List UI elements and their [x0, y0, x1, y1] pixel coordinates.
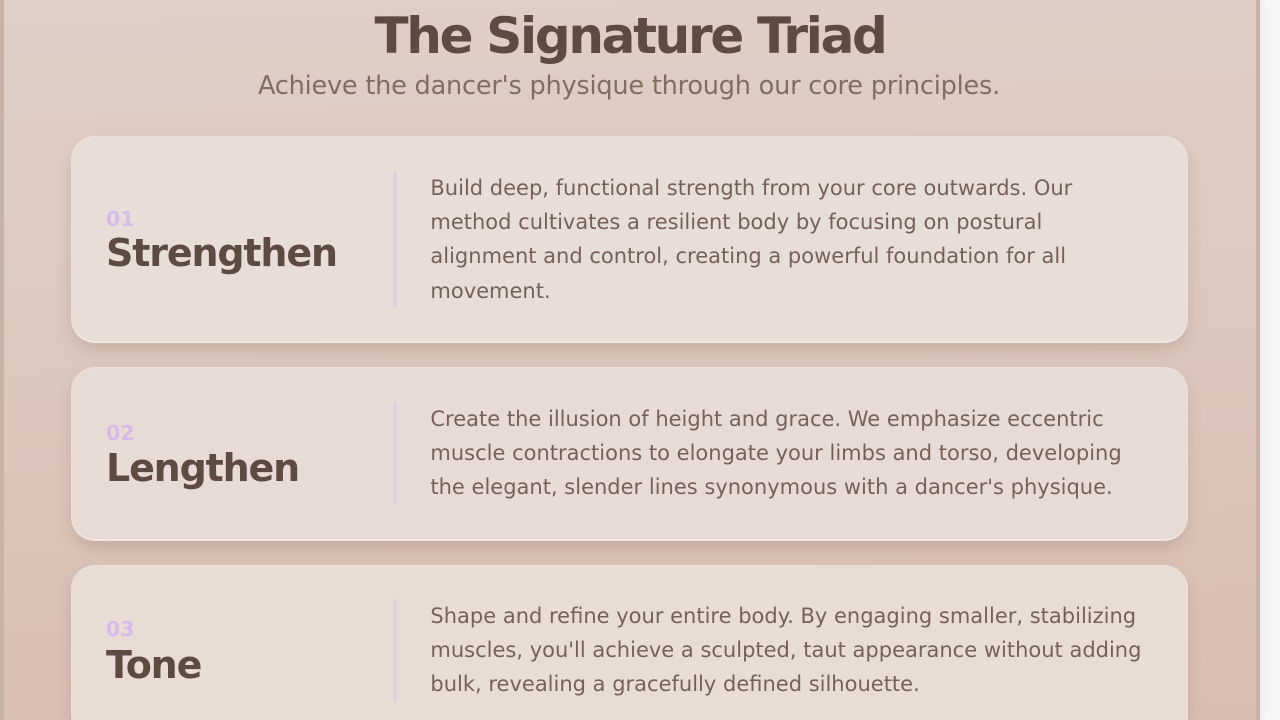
description: tone: Shape and refine your entire body. By engaging smaller, stabilizing — [430, 604, 1136, 628]
description: lengthen: the elegant, slender lines synonymous with a dancer's physique. — [430, 475, 1113, 499]
heading: lengthen: Lengthen — [106, 446, 299, 490]
description: strengthen: Build deep, functional strength from your core outwards. Our — [430, 176, 1072, 200]
heading: strengthen: Strengthen — [106, 231, 337, 275]
panel: tone card — [71, 565, 1188, 720]
description: strengthen — [430, 176, 1072, 303]
accent bar — [393, 402, 397, 505]
description: strengthen: movement. — [430, 279, 551, 303]
description: lengthen — [430, 407, 1122, 499]
heading: tone: Tone — [106, 642, 201, 686]
subtitle: Achieve the dancer's physique through our core principles. — [258, 71, 1000, 101]
step number 02: 02 — [106, 420, 135, 444]
description: tone — [430, 604, 1141, 696]
description: tone: bulk, revealing a gracefully defined silhouette. — [430, 672, 920, 696]
panel: strengthen card — [71, 136, 1188, 343]
panel: lengthen card — [71, 367, 1188, 541]
description: strengthen: method cultivates a resilient body by focusing on postural — [430, 210, 1042, 234]
title: The Signature Triad — [374, 7, 886, 65]
step number 03: 03 — [106, 616, 135, 640]
step number 01: 01 — [106, 206, 135, 230]
description: lengthen: muscle contractions to elongate your limbs and torso, developing — [430, 441, 1122, 465]
description: lengthen: Create the illusion of height and grace. We emphasize eccentric — [430, 407, 1104, 431]
description: strengthen: alignment and control, creating a powerful foundation for all — [430, 244, 1066, 268]
accent bar — [393, 171, 397, 307]
description: tone: muscles, you'll achieve a sculpted, taut appearance without adding — [430, 638, 1141, 662]
accent bar — [393, 599, 397, 702]
